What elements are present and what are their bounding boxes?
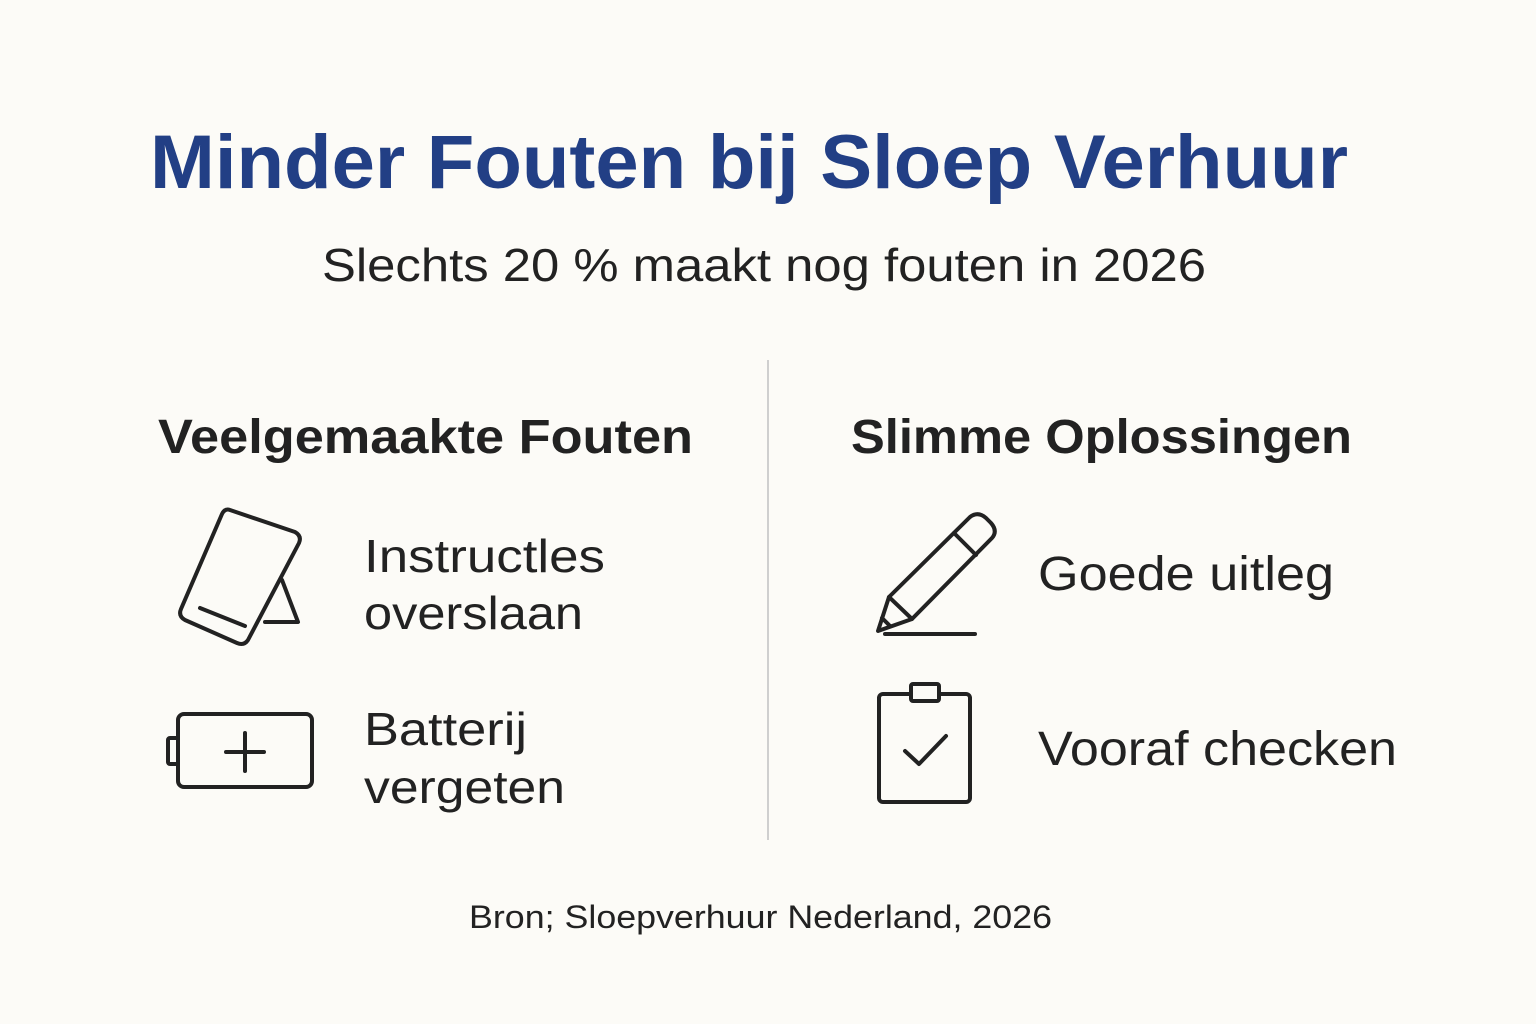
text: vooraf checken: Vooraf checken	[1038, 723, 1397, 776]
text: instructies overslaan: overslaan	[364, 587, 583, 639]
icon: clipboard	[879, 684, 970, 802]
text: batterij vergeten	[364, 703, 565, 813]
icon: battery	[168, 714, 312, 787]
panel: slimme oplossingen	[851, 411, 1397, 802]
icon: pencil	[878, 514, 995, 634]
heading: veelgemaakte fouten: Veelgemaakte Fouten	[158, 411, 693, 464]
source: Bron; Sloepverhuur Nederland, 2026	[469, 899, 1052, 935]
text: batterij vergeten: vergeten	[364, 761, 565, 813]
title: Minder Fouten bij Sloep Verhuur	[150, 120, 1348, 205]
text: goede uitleg: Goede uitleg	[1038, 548, 1334, 601]
subtitle: Slechts 20 % maakt nog fouten in 2026	[322, 239, 1206, 291]
text: instructies overslaan: Instructles	[364, 530, 605, 582]
heading: slimme oplossingen: Slimme Oplossingen	[851, 411, 1352, 464]
panel: veelgemaakte fouten	[158, 411, 693, 813]
text: batterij vergeten: Batterij	[364, 703, 527, 755]
icon: tablet	[180, 510, 300, 644]
text: instructies overslaan	[364, 530, 605, 639]
